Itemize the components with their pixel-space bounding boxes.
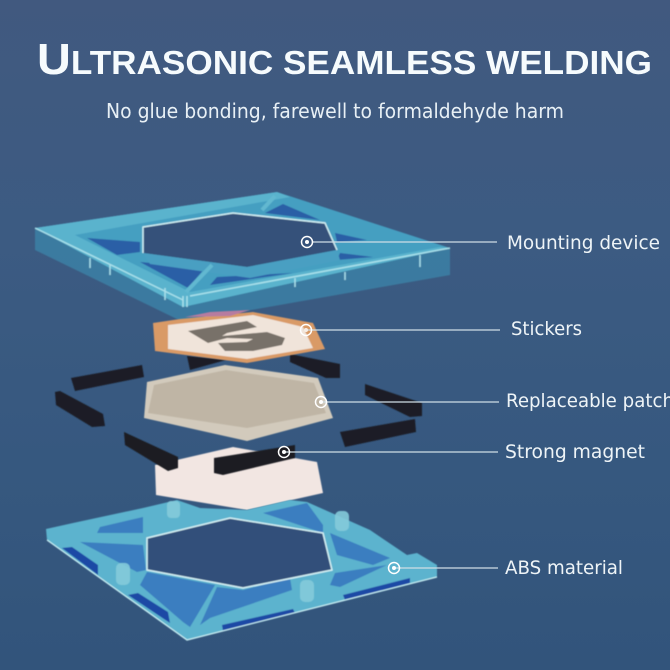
- pillars: [116, 501, 349, 602]
- front magnets: [124, 432, 295, 475]
- sticker: [153, 310, 325, 363]
- callout: mounting device: Mounting device: [507, 232, 660, 254]
- callout: ABS material: [388, 557, 623, 579]
- callout: strong magnet: [278, 441, 645, 463]
- magnet: behind sticker right: [290, 354, 340, 378]
- top frame: mounting device: [35, 192, 450, 322]
- back magnets: [55, 354, 422, 447]
- callout: ABS material: ABS material: [505, 557, 623, 579]
- callout: stickers: Stickers: [511, 318, 582, 340]
- callout: strong magnet: Strong magnet: [505, 441, 645, 463]
- magnet: lower left: [55, 391, 105, 427]
- magnet: upper left: [71, 365, 144, 391]
- callout: stickers: [300, 318, 582, 340]
- white block: [155, 447, 323, 510]
- title: ULTRASONIC SEAMLESS WELDING: [37, 35, 652, 84]
- subtitle: No glue bonding, farewell to formaldehyde harm: [106, 99, 564, 123]
- replaceable patch: [144, 365, 333, 441]
- magnet: behind sticker left: [187, 356, 226, 370]
- magnet: upper right: [365, 384, 422, 417]
- callout: mounting device: [302, 232, 660, 254]
- number five: [188, 321, 285, 351]
- magnet: front left: [124, 432, 178, 471]
- magnet: front centre: [214, 445, 295, 475]
- magnet: lower right: [340, 419, 416, 447]
- callout: replaceable patch: [316, 390, 670, 412]
- bottom frame: ABS material: [46, 500, 437, 640]
